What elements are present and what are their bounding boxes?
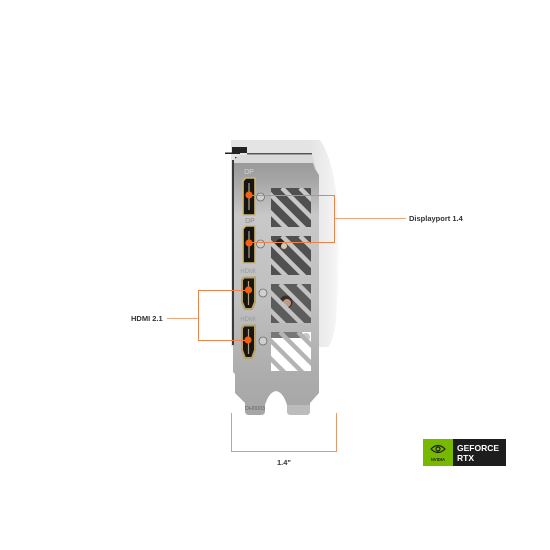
vent slot 4 xyxy=(271,332,311,371)
HDMI connector 2 xyxy=(242,326,255,358)
NVIDIA GeForce RTX badge: GEFORCE xyxy=(457,443,499,453)
width dimension bracket xyxy=(232,413,336,452)
HDMI callout lines xyxy=(167,290,248,340)
NVIDIA GeForce RTX badge: NVIDIA xyxy=(431,457,445,462)
port labels: DP xyxy=(244,169,254,176)
NVIDIA GeForce RTX badge: RTX xyxy=(457,453,474,463)
metal I/O bracket xyxy=(232,155,319,415)
graphics card white shroud xyxy=(231,140,339,347)
bracket stamp text: DH0003 xyxy=(245,406,265,412)
vent slot 2 xyxy=(271,236,311,275)
icon: NVIDIA eye xyxy=(431,446,445,452)
Displayport callout lines xyxy=(249,196,406,242)
screws xyxy=(256,193,267,345)
label: Displayport 1.4: Displayport 1.4 xyxy=(409,214,464,223)
port labels: DP xyxy=(245,218,255,225)
label: 1.4 inch: 1.4" xyxy=(277,458,291,467)
bracket right leg lighter end xyxy=(287,405,310,415)
DisplayPort connector 1 xyxy=(243,178,255,215)
top black bracket clip xyxy=(225,147,312,166)
port labels: HDMI xyxy=(240,269,256,275)
vent slot 1 xyxy=(271,188,311,227)
orange port markers xyxy=(244,191,253,344)
HDMI connector 1 xyxy=(242,278,255,309)
port labels: HDMI xyxy=(240,317,256,323)
bracket left dark edge xyxy=(232,160,234,345)
NVIDIA GeForce RTX badge xyxy=(423,439,506,466)
port labels xyxy=(240,169,256,323)
vent slot 3 xyxy=(271,284,311,323)
DisplayPort connector 2 xyxy=(243,226,255,263)
label: HDMI 2.1: HDMI 2.1 xyxy=(131,314,163,323)
